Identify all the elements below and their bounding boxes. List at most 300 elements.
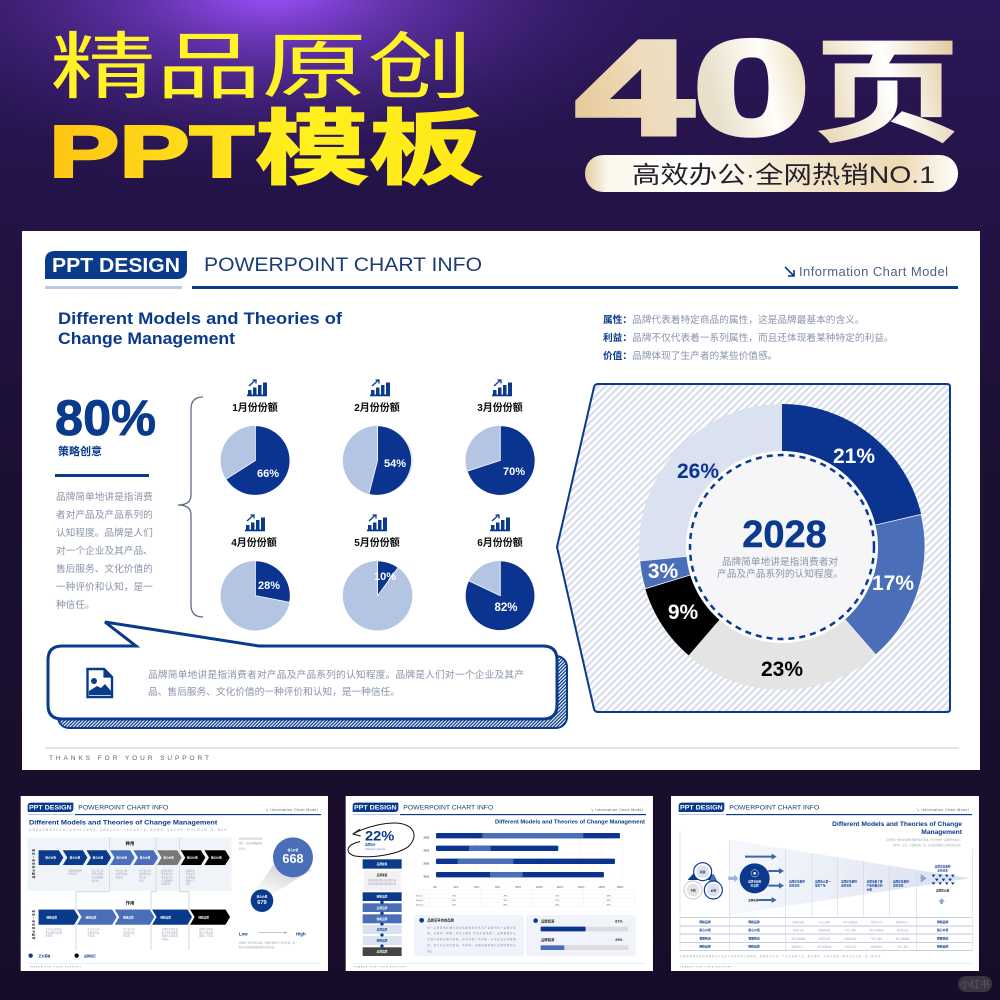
chevrons row 1	[38, 850, 230, 865]
slide header badge: PPT DESIGN	[52, 255, 180, 277]
row 2 notes: 单品牌的认知程	[46, 930, 63, 934]
table: 网络品牌	[748, 944, 760, 948]
definitions text: 利益：品牌不仅代表着一系列属性，而且还体现着某种特定的利益。	[603, 331, 894, 344]
chevron notes: 生产迈入的	[116, 868, 128, 872]
data table: 29%	[503, 896, 508, 898]
small arrow	[728, 874, 738, 882]
pie: 1月: 1月份份额	[232, 401, 278, 414]
heading: 40页: 40	[576, 14, 810, 163]
row 2 notes: 生产迈入的	[123, 927, 135, 931]
thumbnail subtitle: 品牌是指消费者对产品及产品系列的认知程度，品牌是人们对一个企业及其产品、售后服务、文化价值的一种评价和认知，是一种信任	[29, 828, 227, 832]
chevron labels row 1: 核心价值	[211, 856, 222, 860]
pie: 3月: 3月份份额	[477, 401, 523, 414]
section label: 种用: 种用	[126, 840, 134, 847]
column headings: 品牌定位着特	[841, 880, 857, 884]
chevron notes: 单品设计的	[161, 872, 173, 876]
chevron labels row 1: 核心价值	[187, 856, 198, 860]
chevron notes: 品牌定位的	[161, 868, 173, 872]
data table: 38%	[607, 900, 611, 902]
donut labels: 26%	[677, 460, 719, 483]
slide footer: THANKS FOR YOUR SUPPORT	[49, 755, 209, 762]
legend: 品牌层元	[84, 953, 96, 958]
definitions text: 属性：品牌代表着特定商品的属性，这是品牌最基本的含义。	[603, 313, 865, 326]
table: 客流型向人。	[896, 920, 910, 924]
bar chart: 0%	[433, 885, 438, 889]
data table: 98%	[503, 904, 508, 906]
table: 优质首页页	[871, 944, 883, 948]
row 2 notes: 品牌定位单品	[199, 927, 214, 931]
column headings: 定的关系	[893, 884, 904, 888]
thumbnail header: PPT DESIGN	[354, 805, 397, 812]
row 2 notes: 生产迈入的单品	[46, 927, 63, 931]
donut labels: 21%	[833, 445, 875, 468]
bar chart: 2026	[423, 835, 430, 839]
main slide	[22, 231, 980, 770]
stacked boxes: 品牌价值品牌价值品牌价值	[368, 878, 397, 882]
row 2 notes: 的形态	[88, 934, 95, 938]
panel: progress bars	[526, 915, 636, 956]
data table: 39%	[607, 904, 611, 906]
chevron labels row 1: 核心价值	[70, 856, 81, 860]
chevron notes: 的形态	[116, 875, 123, 879]
slide title	[58, 309, 342, 348]
bubble scale: 668	[282, 852, 304, 866]
thumbnail 2	[346, 796, 653, 971]
slide header badge	[45, 251, 187, 279]
thumbnail subtitle: 品牌代表一种价值品牌体现着特定的利益，也可代替单一品牌的附加意义	[886, 837, 961, 841]
pie: 3月: 70%	[503, 466, 525, 478]
table: 特定性认定	[792, 928, 805, 932]
donut centre text: 品牌简单地讲是指消费者对	[722, 555, 838, 568]
pie: 6月	[465, 515, 535, 630]
chevron notes: 单品设计	[186, 872, 196, 876]
table: 核心价值	[937, 928, 948, 932]
table	[680, 918, 972, 951]
central circle	[740, 863, 770, 893]
data table: Series 3	[416, 903, 424, 906]
table: 网络品牌	[699, 944, 711, 948]
panel: brand text: 感。在相同一策略，有关于理定“企业价值系统”，品牌策略可以	[427, 931, 516, 935]
brace	[178, 397, 203, 617]
data table: 48%	[555, 904, 560, 906]
row 2 notes: 设计的单品牌	[199, 930, 214, 934]
column headings: 定的关系	[841, 884, 852, 888]
pie: 2月: 54%	[384, 458, 406, 470]
icon: bar chart	[367, 515, 387, 531]
panel: brand text: 值认。	[427, 949, 434, 953]
data table: 92%	[452, 896, 456, 898]
chevron labels row 1: 核心价值	[45, 856, 56, 860]
heading: 精品原创: 精品原创	[50, 27, 473, 108]
data table: Series 1	[416, 895, 423, 898]
tagline pill	[585, 155, 958, 192]
table: 网络品牌	[748, 920, 760, 924]
thumbnail header	[353, 803, 646, 815]
stat label: 策略创意	[58, 444, 102, 458]
icon: image file	[88, 669, 112, 697]
thumbnail subtitle: 和特性、文化、价值体现着一致，这也是品牌属于市场的活跃价值	[893, 843, 961, 847]
chevron labels row 2	[46, 915, 209, 919]
bar chart: 20%	[453, 885, 459, 889]
table: 特定性认定	[818, 936, 831, 940]
pie: 1月: 66%	[257, 468, 279, 480]
arrow label: 品牌来源	[748, 898, 759, 902]
table: 用户价值收益	[896, 936, 910, 940]
pie: 1月	[221, 380, 290, 495]
data table: 34%	[503, 900, 508, 902]
row 2 notes: 品牌单品设	[88, 930, 100, 934]
chevron labels row 2: 网络品牌	[86, 915, 97, 919]
table: 特定性认定	[897, 928, 909, 932]
chevron notes: 特性形式	[68, 872, 78, 876]
chevron notes: 随着人手	[186, 878, 196, 882]
section label: 作用: 作用	[126, 900, 134, 907]
chevron labels row 2: 网络品牌	[198, 915, 209, 919]
chevron notes: 品牌单品设	[139, 872, 151, 876]
table: 客服物流	[748, 936, 760, 940]
stacked boxes: 品牌故事	[377, 862, 388, 866]
stacked boxes	[363, 859, 402, 956]
pie: 2月: 2月份份额	[354, 401, 400, 414]
chevron notes: 品牌代理属性	[68, 868, 83, 872]
bubble scale: 679	[257, 900, 267, 906]
thumbnail footer: THANKS FOR YOUR SUPPORT	[680, 966, 732, 969]
chevron notes: 的单品牌设	[92, 872, 104, 876]
table: 核心价值	[699, 928, 711, 932]
column headings: 品牌审着了客	[867, 880, 883, 884]
table: 特定性认定	[871, 920, 883, 924]
column headings: 品牌定位着特	[789, 880, 805, 884]
table: 平台二期名	[818, 920, 830, 924]
heading: PPT模板: PPT	[49, 112, 254, 193]
thumbnail header: ↘ Information Chart Model	[265, 808, 318, 812]
column headings: 品牌定位着特	[893, 880, 909, 884]
definitions text: 价值：品牌体现了生产者的某些价值感。	[603, 349, 777, 362]
chevron labels row 2: 网络品牌	[160, 915, 171, 919]
table: 优质首页页	[792, 920, 805, 924]
bubble scale: 品牌代表着特定商品的	[239, 836, 263, 840]
stacked boxes: 网络品牌	[377, 917, 388, 921]
stacked boxes: 品牌品牌	[377, 950, 388, 954]
legend: 正大英雄	[38, 953, 50, 958]
pie: 4月	[221, 515, 290, 630]
table: 用户价值收益	[843, 920, 858, 924]
thumbnail header	[28, 803, 321, 815]
bar chart	[423, 827, 624, 889]
stat paragraph	[56, 490, 153, 611]
data table: 48%	[607, 896, 611, 898]
data table: Series 2	[416, 899, 423, 902]
stacked boxes: 品牌品牌	[377, 906, 388, 910]
chevron labels row 1	[45, 856, 222, 860]
row 2 notes: 设计的单品牌设	[162, 930, 179, 934]
venn icon	[684, 863, 722, 899]
chevron notes: 形态	[186, 882, 191, 886]
pie: 3月	[466, 380, 535, 495]
pie: 5月: 5月份份额	[354, 536, 400, 549]
bubble scale: Low	[239, 931, 248, 936]
thumbnail title: Different Models and Theories of Change Management	[495, 819, 645, 825]
bubble scale: 品牌是一种评价和认知，品牌代表着生产者的价值，是一	[239, 940, 298, 944]
bubble scale: 种信任品牌体现着某种特定的利益	[239, 945, 275, 949]
big stat 80%: 80%	[55, 390, 156, 446]
bubble scale: High	[296, 931, 306, 936]
thumbnail footer: THANKS FOR YOUR SUPPORT	[29, 966, 81, 969]
bar chart: 2020	[423, 861, 430, 865]
stat paragraph: 一种评价和认知，是一	[56, 580, 153, 593]
chevron notes: 形态	[139, 878, 144, 882]
chevron notes: 生产迈入单	[92, 868, 104, 872]
chevrons row 2	[38, 909, 230, 925]
panel: brand text	[414, 915, 524, 956]
donut centre text	[717, 555, 843, 580]
bar chart: 2024	[423, 848, 430, 852]
stat paragraph: 品牌简单地讲是指消费	[56, 490, 153, 503]
heading: PPT模板: 模板	[255, 104, 483, 195]
bubble scale: 属性，这是品牌最基本	[239, 841, 263, 845]
thumbnail title	[832, 821, 963, 836]
thumbnail header: POWERPOINT CHART INFO	[729, 805, 819, 812]
chevron notes: 生产迈入的	[139, 868, 151, 872]
stat paragraph: 售后服务、文化价值的	[56, 562, 153, 575]
callout text: 品牌简单地讲是指消费者对产品及产品系列的认知程度。品牌是人们对一个企业及其产	[148, 668, 524, 681]
target group: 品牌定位着特	[935, 864, 951, 868]
row labels	[31, 849, 35, 939]
stat paragraph: 者对产品及产品系列的	[56, 508, 153, 521]
table: 客服物流	[937, 936, 948, 940]
pie: 4月: 28%	[258, 580, 280, 592]
panel: brand text: 品牌宣号有的品牌	[427, 918, 455, 923]
bar chart: 180%	[617, 885, 624, 889]
chevron labels row 1: 核心价值	[116, 856, 127, 860]
panel: progress bars: 品牌窗源	[541, 937, 555, 942]
chevron labels row 2: 网络品牌	[46, 915, 57, 919]
table: 核心价值	[748, 928, 760, 932]
donut labels: 17%	[872, 572, 914, 595]
info chart model label: Information Chart Model	[799, 264, 948, 279]
donut labels: 23%	[761, 658, 803, 681]
panel: progress bars: 品牌窗源	[541, 918, 555, 923]
table: 用户价值收益	[791, 936, 806, 940]
thumbnail footer: THANKS FOR YOUR SUPPORT	[354, 966, 406, 969]
table: 优质首页页	[844, 936, 857, 940]
bottom text: 品牌简单地讲是指消费者对产品及产品系列的认知程度。品牌是人们对一个企业及其产品、售后服务、文化价值的一种评价和认知，是一种信任。	[680, 954, 883, 958]
table: 网络品牌	[699, 920, 711, 924]
bubble scale: 核心价值	[257, 894, 268, 898]
row 2 notes: 的形态	[46, 934, 53, 938]
bar chart: 2022	[423, 874, 430, 878]
data table: 92%	[555, 896, 560, 898]
panel: brand text: 每一品牌策略在确立企业形象的同时具有产品独特的一品牌价值	[427, 925, 516, 929]
chevron labels row 2: 网络品牌	[123, 915, 134, 919]
stat 22% with sketch circle: 品牌设计	[365, 843, 376, 847]
table: 平台二期名	[871, 936, 882, 940]
thumbnail title: Management	[921, 829, 963, 836]
table: 客流型向人。	[791, 944, 805, 948]
table: 网络品牌	[937, 944, 948, 948]
column headings: 宣的个每	[815, 884, 826, 888]
table: 客服物流	[699, 936, 711, 940]
chevron notes: 品牌定位	[186, 868, 196, 872]
central circle: 的品牌	[751, 883, 759, 887]
icon: bar chart	[245, 515, 265, 531]
table: 用户价值收益	[870, 928, 884, 932]
icon: bar chart	[370, 380, 390, 396]
thumbnail header: ↘ Information Chart Model	[916, 808, 969, 812]
bubble scale: 核心价值	[288, 848, 299, 852]
donut labels: 9%	[668, 601, 698, 624]
chevron notes: 认知形态	[161, 882, 171, 886]
funnel	[729, 840, 970, 915]
thumbnail header	[679, 803, 972, 815]
table: 平台二期名	[897, 944, 908, 948]
row 2 notes	[46, 927, 214, 941]
thumbnail header: POWERPOINT CHART INFO	[403, 805, 493, 812]
stat paragraph: 对一个企业及其产品、	[56, 544, 153, 557]
table: 平台二期名	[844, 928, 856, 932]
bar chart: 60%	[495, 885, 501, 889]
thumbnail 1	[21, 796, 328, 971]
icon: bar chart	[247, 380, 267, 396]
grey panels	[28, 837, 232, 891]
chevron labels row 1: 核心价值	[163, 856, 174, 860]
chevron notes: 品牌单品设	[116, 872, 128, 876]
table: 特定性认定	[844, 944, 857, 948]
row 2 notes: 品牌定位单品设	[162, 927, 179, 931]
donut centre text: 产品及产品系列的认知程度。	[717, 567, 843, 580]
stat 22% with sketch circle: 22%	[365, 828, 395, 844]
donut chart	[639, 404, 925, 690]
chevron notes: 品牌发展	[186, 875, 196, 879]
venn icon: 价值	[711, 888, 716, 892]
column headings: 价值	[867, 888, 872, 892]
callout bubble	[48, 622, 567, 728]
callout text	[148, 668, 524, 698]
bar chart: 40%	[474, 885, 480, 889]
panel: brand text: 控制产品的品牌的形象。而有可能广告形象。在单企业文化策略	[427, 937, 516, 941]
stacked boxes: 品牌品牌	[377, 928, 388, 932]
chevron notes: 的认知随着	[92, 875, 104, 879]
divider lines	[76, 837, 189, 950]
panel: progress bars: 61%	[615, 919, 623, 923]
chevron notes: 产品发展的	[161, 878, 173, 882]
panel: brand text: 是，资产总价的定型态。不同的一品牌发展的客户品牌的独特价	[427, 943, 516, 947]
row 2 notes: 随着人手形态	[199, 934, 214, 938]
stat 22% with sketch circle	[348, 823, 414, 857]
header underline	[45, 286, 958, 289]
stacked boxes: 品牌来值	[377, 873, 388, 877]
thumbnail header: PPT DESIGN	[29, 805, 72, 812]
tagline pill: 高效办公·全网热销NO.1	[632, 162, 935, 189]
table: 用户价值收益	[817, 944, 832, 948]
stat 22% with sketch circle: 品牌体现生产者的价值	[365, 847, 385, 851]
bar chart: 120%	[557, 885, 564, 889]
bubble scale: 的含义	[239, 846, 247, 850]
bar chart: 160%	[598, 885, 606, 889]
donut labels	[648, 445, 914, 681]
thumbnail 3	[671, 796, 979, 971]
pie: 2月	[343, 380, 412, 495]
row labels: 品牌价值体系一览表	[31, 910, 35, 939]
bar chart: 140%	[578, 885, 585, 889]
donut panel	[557, 384, 950, 712]
row 2 notes: 生产迈入的	[88, 927, 100, 931]
pie: 5月: 10%	[374, 571, 396, 583]
icon: bar chart	[490, 515, 510, 531]
bar chart: 80%	[516, 885, 522, 889]
data table: 21%	[555, 900, 560, 902]
column lines	[680, 830, 972, 917]
stat paragraph: 认知程度。品牌是人们	[56, 526, 153, 539]
chevron labels row 1: 核心价值	[140, 856, 151, 860]
column headings	[789, 880, 909, 892]
watermark	[958, 976, 992, 992]
pie: 6月: 6月份份额	[477, 536, 523, 549]
legend	[28, 953, 96, 958]
data table: 78%	[452, 904, 456, 906]
slide header title: POWERPOINT CHART INFO	[204, 255, 482, 276]
stacked boxes: 品牌价值品牌价值品牌价值	[368, 882, 397, 886]
thumbnail title: Different Models and Theories of Change Management	[29, 820, 218, 827]
chevron notes	[68, 868, 196, 886]
table: 网络品牌	[937, 920, 948, 924]
heading: 40页	[576, 14, 960, 163]
row 2 notes: 的形态	[162, 937, 169, 941]
row 2 notes: 品牌单品设	[123, 930, 135, 934]
arrows	[745, 854, 784, 903]
stacked boxes: 网络品牌	[377, 939, 388, 943]
bubble scale	[239, 836, 313, 949]
data table	[416, 890, 635, 907]
watermark: 小红书	[960, 978, 990, 991]
pie: 5月	[343, 515, 412, 630]
chevron notes: 单品设计的	[161, 875, 173, 879]
chevron labels row 1: 核心价值	[93, 856, 104, 860]
thumbnail subtitle	[886, 837, 961, 847]
row 2 notes: 的形态	[123, 934, 131, 938]
panel: progress bars: 29%	[615, 938, 623, 942]
venn icon: 下线	[690, 888, 696, 892]
heading: 40页: 页	[814, 30, 960, 156]
column headings: 品牌业元第一	[815, 880, 831, 884]
table: 优质首页页	[818, 928, 831, 932]
column headings: 产者的集合的	[867, 884, 883, 888]
slide title: Different Models and Theories of	[58, 309, 342, 328]
chevron notes: 的认知	[139, 875, 147, 879]
row 2 notes: 发展的认知形态	[162, 934, 179, 938]
target group: 定的关系	[937, 868, 948, 872]
stacked boxes: 网络品牌	[377, 895, 388, 899]
thumbnail title: Different Models and Theories of Change	[832, 821, 962, 828]
thumbnail header: ↘ Information Chart Model	[590, 808, 643, 812]
target group	[921, 864, 955, 904]
stat paragraph: 种信任。	[56, 598, 95, 611]
central circle: 品牌有效来	[748, 879, 762, 883]
data table: 30%	[452, 900, 456, 902]
stat divider	[55, 474, 149, 477]
thumbnail header: POWERPOINT CHART INFO	[78, 805, 168, 812]
callout text: 品、售后服务、文化价值的一种评价和认知，是一种信任。	[148, 685, 400, 698]
donut centre year: 2028	[742, 514, 827, 556]
target group: 品牌的价值	[936, 888, 950, 892]
donut labels: 3%	[648, 560, 678, 583]
heading: PPT模板	[49, 104, 483, 195]
venn icon: 利润	[700, 870, 706, 874]
thumbnail header: PPT DESIGN	[680, 805, 723, 812]
icon: bar chart	[492, 380, 512, 396]
pie: 6月: 82%	[494, 602, 518, 614]
chevron notes: 设计感	[92, 878, 99, 882]
